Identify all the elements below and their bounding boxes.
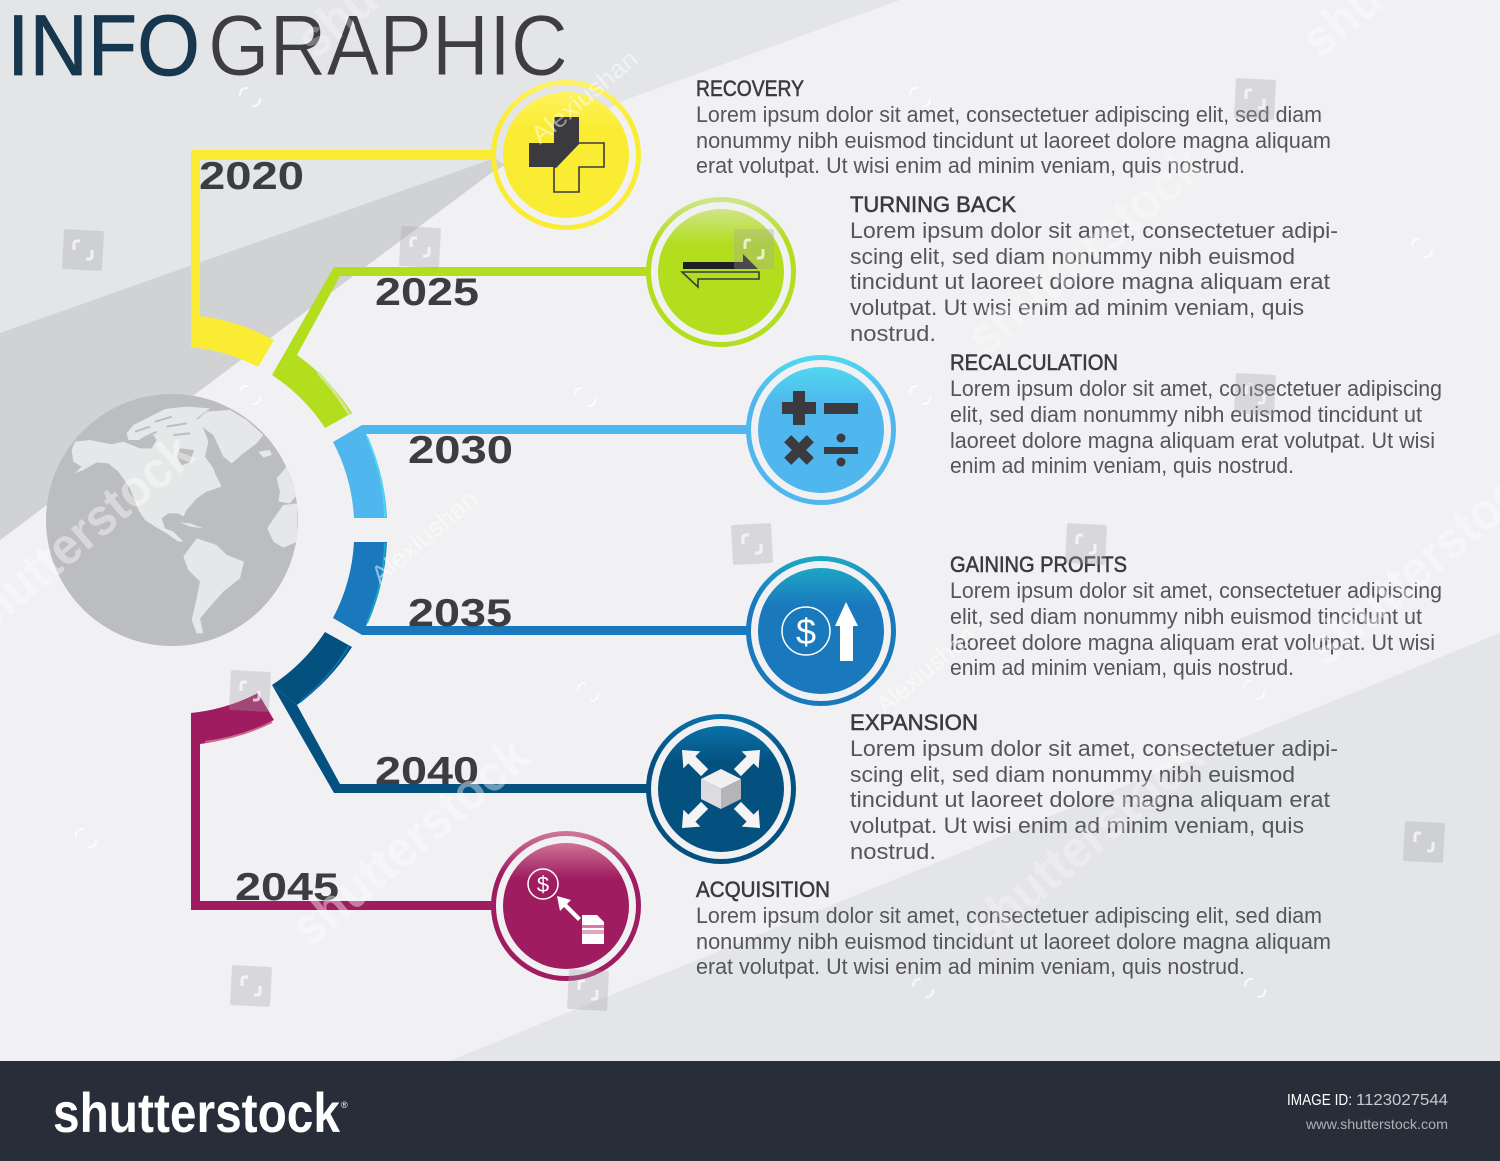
branch: 2025 green [272, 267, 650, 428]
watermark overlay: Alexiushan [871, 621, 981, 720]
text block: acquisition [696, 877, 1331, 979]
icon: expansion cube and arrows [648, 716, 794, 862]
year: 2020: 2020 [199, 155, 304, 198]
text block: recalculation: RECALCULATION [950, 350, 1118, 375]
text block: recalculation: enim ad minim veniam, quis nostrud. [950, 453, 1294, 478]
footer registered mark: ® [341, 1100, 348, 1110]
footer bar [0, 1061, 1500, 1161]
footer image id [1287, 1092, 1448, 1109]
icon: gaining profits dollar and arrow [748, 558, 894, 704]
title: GRAPHIC [208, 0, 568, 94]
watermark overlay: shutterstock [955, 726, 1215, 957]
text block: turning back: volutpat. Ut wisi enim ad minim veniam, quis [850, 295, 1304, 320]
icon: recalculation math symbols [748, 358, 894, 502]
text block: recalculation: elit, sed diam nonummy nibh euismod tincidunt ut [950, 402, 1422, 427]
text block: acquisition: nonummy nibh euismod tincidunt ut laoreet dolore magna aliquam [696, 929, 1331, 954]
text block: expansion [850, 710, 1338, 864]
text block: recovery: Lorem ipsum dolor sit amet, consectetuer adipiscing elit, sed diam [696, 102, 1322, 127]
text block: recovery: erat volutpat. Ut wisi enim ad minim veniam, quis nostrud. [696, 153, 1245, 178]
text block: expansion: Lorem ipsum dolor sit amet, consectetuer adipi- [850, 736, 1338, 761]
icon: acquisition dollar and document: $ [537, 872, 549, 897]
year: 2045: 2045 [235, 866, 339, 909]
text block: gaining profits: Lorem ipsum dolor sit amet, consectetuer adipiscing [950, 578, 1442, 603]
text block: gaining profits: elit, sed diam nonummy nibh euismod tincidunt ut [950, 604, 1422, 629]
watermark overlay: shutterstock [280, 726, 540, 957]
text block: expansion: scing elit, sed diam nonummy nibh euismod [850, 762, 1295, 787]
text block: recovery [696, 76, 1331, 178]
text block: turning back: nostrud. [850, 321, 936, 346]
text block: gaining profits [950, 552, 1442, 680]
text block: expansion: EXPANSION [850, 710, 978, 735]
icon: acquisition dollar and document [494, 834, 638, 978]
text block: recalculation [950, 350, 1442, 478]
text block: expansion: nostrud. [850, 839, 936, 864]
title: INFO [7, 0, 200, 94]
text block: turning back: Lorem ipsum dolor sit amet, consectetuer adipi- [850, 218, 1338, 243]
text block: expansion: volutpat. Ut wisi enim ad minim veniam, quis [850, 813, 1304, 838]
text block: recalculation: Lorem ipsum dolor sit amet, consectetuer adipiscing [950, 376, 1442, 401]
footer logo: shutterstock [53, 1081, 341, 1144]
text block: recalculation: laoreet dolore magna aliquam erat volutpat. Ut wisi [950, 428, 1435, 453]
icon: gaining profits dollar and arrow: $ [796, 611, 816, 652]
footer image id: IMAGE ID: [1287, 1092, 1352, 1109]
watermark overlay: shutterstock [955, 136, 1215, 367]
text block: turning back: scing elit, sed diam nonummy nibh euismod [850, 244, 1295, 269]
globe [46, 394, 298, 646]
text block: turning back: TURNING BACK [850, 192, 1016, 217]
text block: gaining profits: enim ad minim veniam, quis nostrud. [950, 655, 1294, 680]
footer url: www.shutterstock.com [1305, 1116, 1448, 1132]
text block: turning back: tincidunt ut laoreet dolore magna aliquam erat [850, 269, 1330, 294]
text block: acquisition: ACQUISITION [696, 877, 830, 902]
text block: gaining profits: laoreet dolore magna aliquam erat volutpat. Ut wisi [950, 630, 1435, 655]
title [7, 0, 568, 94]
text block: gaining profits: GAINING PROFITS [950, 552, 1127, 577]
branch: 2030 light blue [333, 425, 750, 518]
icon: turning back arrows [648, 200, 794, 344]
footer image id: 1123027544 [1356, 1092, 1448, 1109]
text block: recovery: RECOVERY [696, 76, 804, 101]
text block: recovery: nonummy nibh euismod tincidunt ut laoreet dolore magna aliquam [696, 128, 1331, 153]
text block: acquisition: Lorem ipsum dolor sit amet, consectetuer adipiscing elit, sed diam [696, 903, 1322, 928]
year: 2030: 2030 [408, 429, 513, 472]
text block: turning back [850, 192, 1338, 346]
watermark overlay: Alexiushan [366, 485, 483, 590]
branch: 2035 blue [333, 542, 750, 635]
branch: 2020 yellow [191, 150, 495, 367]
text block: expansion: tincidunt ut laoreet dolore magna aliquam erat [850, 787, 1330, 812]
year: 2035: 2035 [408, 592, 512, 635]
year: 2040: 2040 [375, 750, 479, 793]
icon: recovery cross [494, 82, 638, 228]
branch: 2040 dark blue [272, 632, 650, 793]
year: 2025: 2025 [375, 271, 479, 314]
text block: acquisition: erat volutpat. Ut wisi enim ad minim veniam, quis nostrud. [696, 954, 1245, 979]
branch: 2045 magenta [191, 693, 495, 910]
watermark overlay: Alexiushan [526, 45, 643, 150]
